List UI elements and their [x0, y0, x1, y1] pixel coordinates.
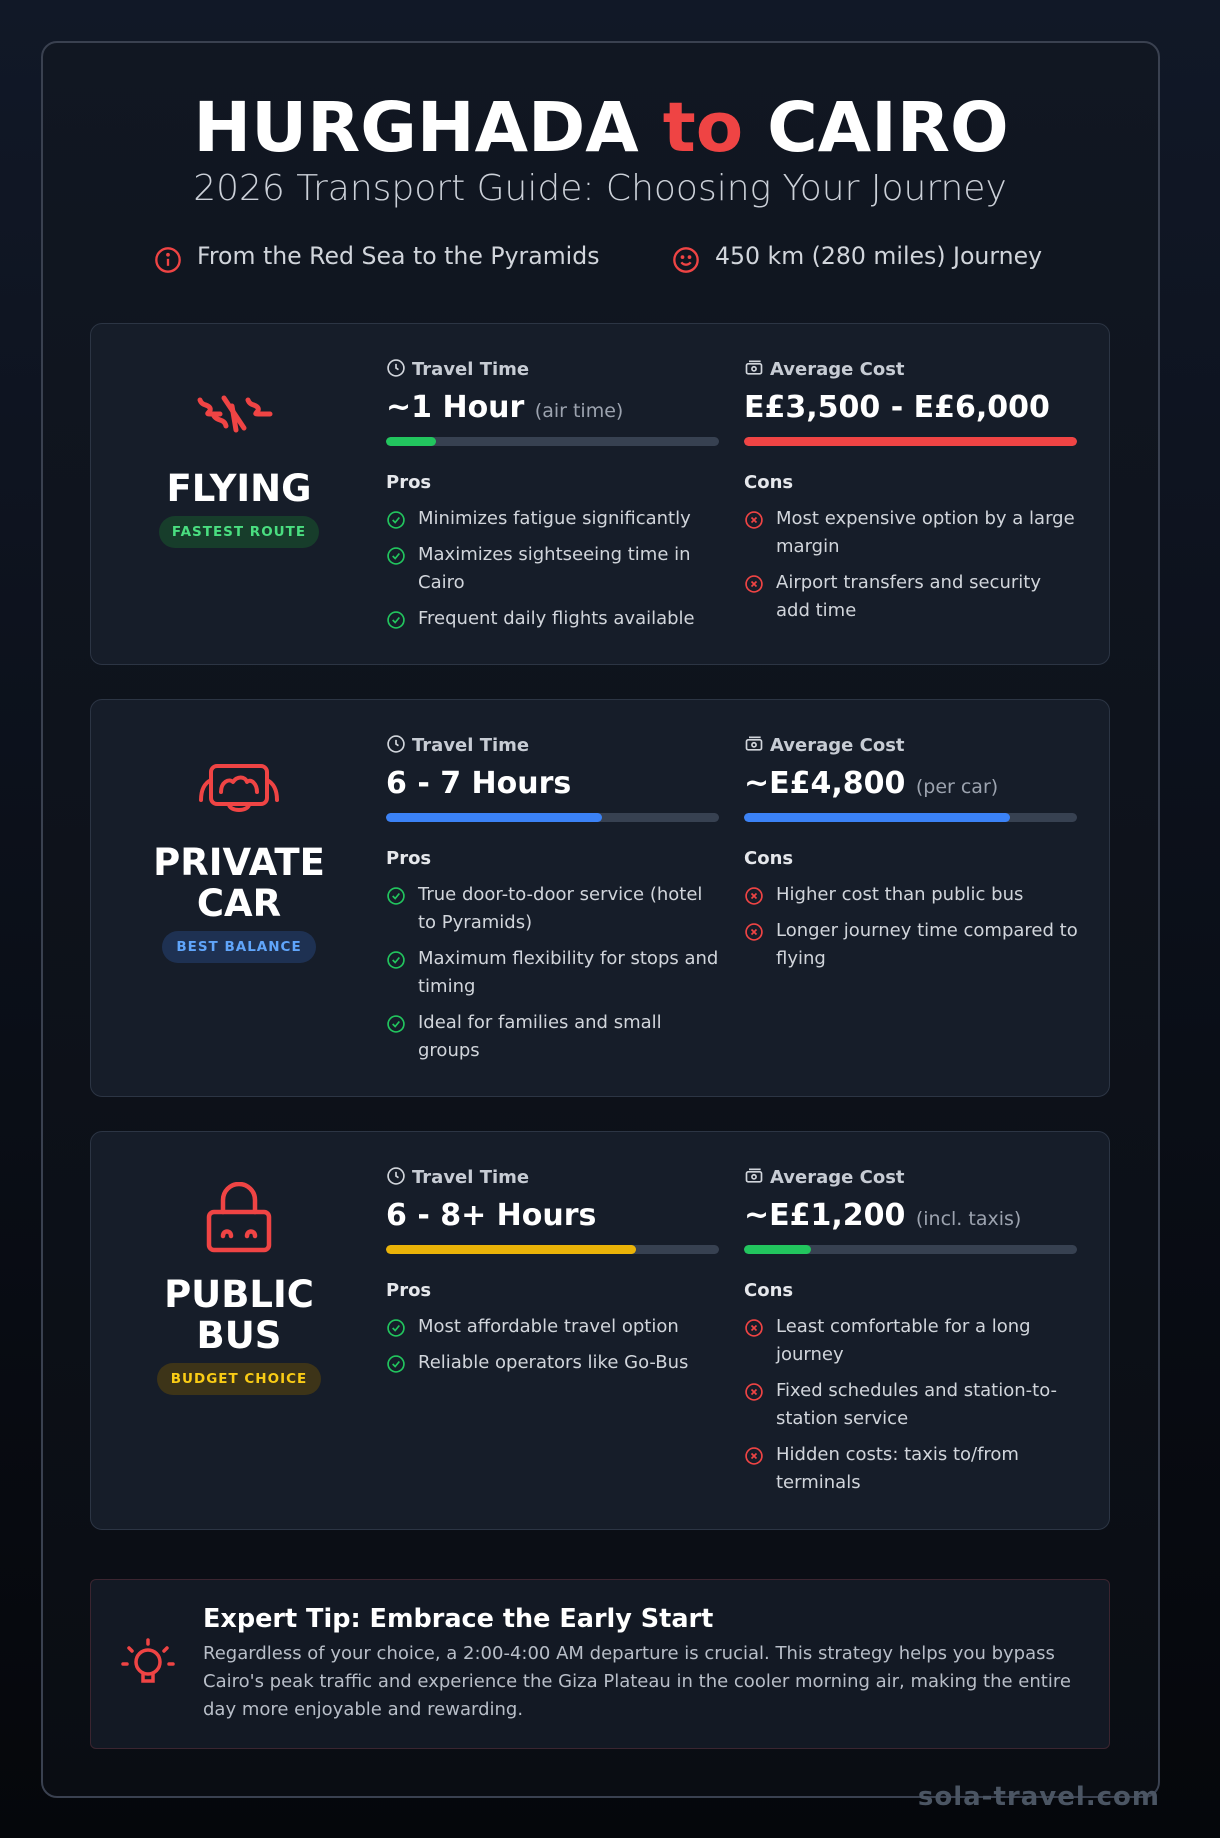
list: pros: Reliable operators like Go-Bus	[418, 1352, 688, 1373]
list: cons: Hidden costs: taxis to/from terminals	[776, 1444, 1019, 1493]
list: pros: Ideal for families and small groups	[418, 1012, 662, 1061]
list: cons	[745, 1316, 1057, 1493]
list: pros: Maximizes sightseeing time in Cairo	[418, 544, 691, 593]
list: pros	[387, 508, 695, 629]
list: pros: Most affordable travel option	[418, 1316, 679, 1337]
heading: public bus: BUS	[197, 1314, 281, 1357]
heading: cons: Cons	[744, 1280, 793, 1301]
value: cost: E£3,500 - E£6,000	[744, 390, 1050, 425]
bar: time	[386, 437, 719, 446]
bar: cost	[744, 813, 1077, 822]
icon: info	[155, 247, 181, 273]
heading: private car	[153, 841, 325, 925]
bar: time	[386, 1245, 719, 1254]
watermark: sola-travel.com	[918, 1782, 1160, 1812]
value: cost: ~E£4,800 (per car)	[744, 766, 998, 801]
badge: fastest: FASTEST ROUTE	[172, 524, 306, 540]
list: cons: Higher cost than public bus	[776, 884, 1023, 905]
list: cons: Least comfortable for a long journey	[776, 1316, 1031, 1365]
heading: private car: PRIVATE	[153, 841, 325, 884]
text: distance: 450 km (280 miles) Journey	[715, 242, 1042, 270]
text: tip body: Regardless of your choice, a 2:00-4:00 AM departure is crucial. This strategy helps you bypass Cairo's peak traffic and experience the Giza Plateau in the cooler morning air, making the entire day more enjoyable and rewarding.	[203, 1643, 1071, 1720]
list: cons: Most expensive option by a large margin	[776, 508, 1075, 557]
heading: pros: Pros	[386, 472, 431, 493]
value: cost: ~E£1,200 (incl. taxis)	[744, 1198, 1021, 1233]
icon: car	[199, 764, 279, 812]
list: pros: True door-to-door service (hotel to Pyramids)	[418, 884, 702, 933]
panel: private car	[90, 699, 1110, 1097]
list: pros: Minimizes fatigue significantly	[418, 508, 691, 529]
bar: cost	[744, 437, 1077, 446]
value: time: 6 - 8+ Hours	[386, 1198, 596, 1233]
icon: bus	[206, 1182, 272, 1252]
value: time: 6 - 7 Hours	[386, 766, 571, 801]
list: cons	[745, 508, 1075, 621]
heading: cons: Cons	[744, 472, 793, 493]
panel: expert tip	[90, 1579, 1110, 1749]
list: cons	[745, 884, 1078, 969]
icon: plane	[198, 396, 272, 432]
label: travel time: Travel Time	[412, 1167, 529, 1188]
list: pros	[387, 884, 718, 1061]
list: pros: Maximum flexibility for stops and timing	[418, 948, 718, 997]
heading: public bus	[164, 1273, 314, 1357]
badge: budget: BUDGET CHOICE	[171, 1371, 307, 1387]
bar: time	[386, 813, 719, 822]
badge: fastest	[159, 516, 319, 548]
badge: best balance: BEST BALANCE	[176, 939, 302, 955]
heading: pros: Pros	[386, 848, 431, 869]
label: travel time: Travel Time	[412, 359, 529, 380]
list: cons: Airport transfers and security add time	[776, 572, 1041, 621]
panel: flying	[90, 323, 1110, 665]
title: HURGHADA to CAIRO	[193, 88, 1009, 168]
list: pros: Frequent daily flights available	[418, 608, 695, 629]
list: cons: Fixed schedules and station-to-station service	[776, 1380, 1057, 1429]
icon: bulb	[121, 1638, 175, 1683]
subtitle: 2026 Transport Guide: Choosing Your Journey	[193, 168, 1007, 209]
info row	[155, 242, 1042, 273]
heading: private car: CAR	[197, 882, 281, 925]
value: time: ~1 Hour (air time)	[386, 390, 623, 425]
text: red sea: From the Red Sea to the Pyramids	[197, 242, 600, 270]
label: cost: Average Cost	[770, 735, 905, 756]
heading: flying: FLYING	[166, 467, 311, 510]
icon: smile	[673, 247, 699, 273]
list: cons: Longer journey time compared to flying	[776, 920, 1078, 969]
panel: public bus	[90, 1131, 1110, 1530]
label: cost: Average Cost	[770, 1167, 905, 1188]
badge: budget	[157, 1363, 321, 1395]
heading: pros: Pros	[386, 1280, 431, 1301]
heading: cons: Cons	[744, 848, 793, 869]
label: cost: Average Cost	[770, 359, 905, 380]
label: travel time: Travel Time	[412, 735, 529, 756]
heading: public bus: PUBLIC	[164, 1273, 314, 1316]
bar: cost	[744, 1245, 1077, 1254]
heading: tip: Expert Tip: Embrace the Early Start	[203, 1604, 713, 1634]
list: pros	[387, 1316, 688, 1373]
badge: best balance	[162, 931, 316, 963]
